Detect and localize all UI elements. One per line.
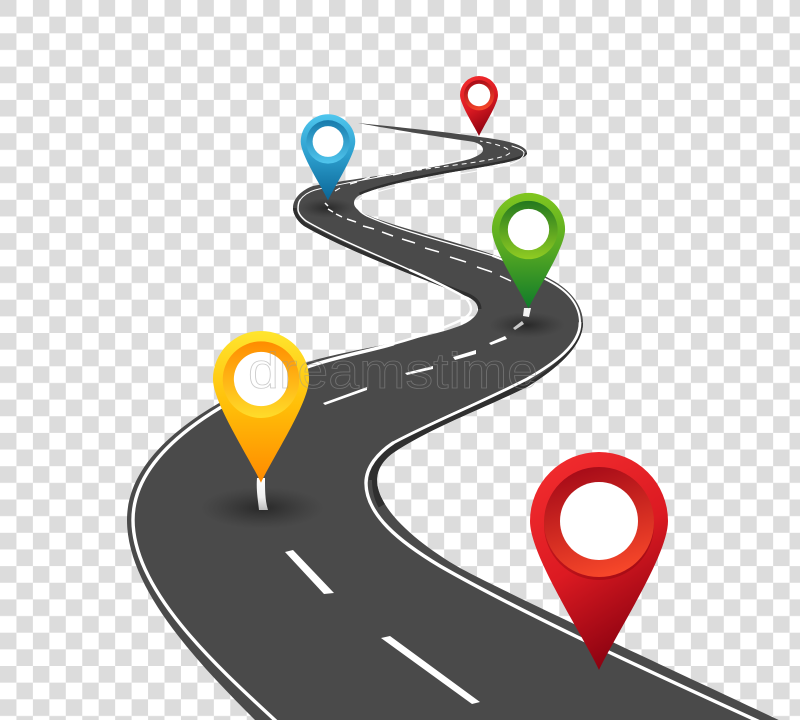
blue pin body [301,114,355,200]
blue pin [301,114,355,200]
winding road [127,123,800,720]
small red pin ring [464,80,494,110]
watermark text: dreamstime [248,343,538,399]
yellow pin white centre [234,352,288,406]
road surface [127,123,800,720]
centre dashes near [285,321,524,704]
large red pin ring shadow [544,470,654,580]
green pin body [492,193,565,308]
shadow under yellow pin [200,487,324,529]
centre dashes far [325,141,511,281]
shadow under green pin [501,316,553,334]
blue pin white centre [313,126,343,157]
small red pin white centre [468,84,490,106]
large red pin ring [544,467,654,577]
white edge line right side [357,146,760,720]
yellow pin stem on road [257,478,268,510]
green pin ring [499,201,558,259]
white edge line left side [133,158,471,720]
green pin white centre [508,209,549,250]
yellow pin ring [223,341,299,418]
shadow under blue pin [308,201,346,215]
blue pin ring [306,120,350,164]
large red pin [530,452,668,670]
road dark shoulders [293,153,583,505]
yellow pin [213,331,309,483]
small red pin [460,76,498,136]
green pin stem on road [523,308,531,317]
large red pin body [530,452,668,670]
large red pin white centre [560,482,638,560]
small red pin body [460,76,498,136]
green pin [492,193,565,308]
yellow pin body [213,331,309,483]
